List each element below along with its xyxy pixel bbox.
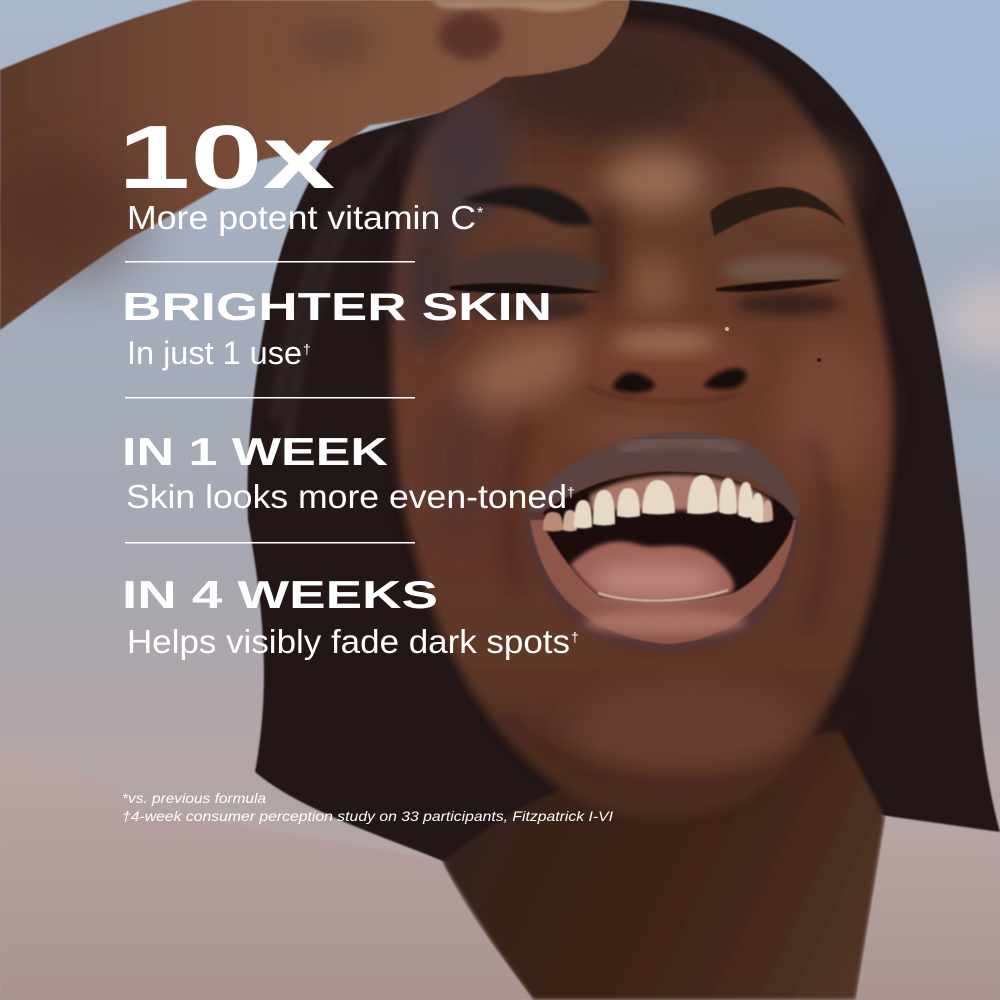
hair <box>247 0 1000 862</box>
footnote mark: † <box>571 629 579 645</box>
stat: brighter skin <box>122 286 552 371</box>
fist fold <box>438 12 502 60</box>
subline: Helps visibly fade dark spots <box>127 623 570 660</box>
arm <box>0 0 630 330</box>
knuckles <box>430 0 605 12</box>
headline 10x: 10x <box>118 108 335 208</box>
stat: in 1 week <box>122 431 575 515</box>
upper lip highlight <box>620 442 740 450</box>
footnote mark: * <box>477 205 483 222</box>
nose <box>584 324 821 402</box>
subline: In just 1 use <box>127 335 302 371</box>
eyebrow left <box>463 186 593 225</box>
lower lip <box>523 512 800 653</box>
subline: Skin looks more even-toned <box>126 478 567 515</box>
footnotes <box>122 790 613 824</box>
upper lip <box>527 432 801 518</box>
elbow shadow <box>0 155 140 275</box>
eyebrow right <box>710 187 846 236</box>
mouth interior <box>543 471 794 602</box>
eye left <box>450 248 604 320</box>
teeth <box>543 475 773 532</box>
shirt right <box>856 816 1000 1000</box>
mouth <box>523 432 801 653</box>
shirt left <box>0 751 533 1000</box>
forehead shadow from arm <box>402 45 700 350</box>
neck <box>442 730 885 1000</box>
eye right <box>716 255 847 315</box>
skin highlights <box>420 145 880 780</box>
footnotes: †4-week consumer perception study on 33 participants, Fitzpatrick I-VI <box>122 808 613 824</box>
footnote mark: † <box>303 341 311 357</box>
stat: in 4 weeks <box>122 574 579 660</box>
footnotes: *vs. previous formula <box>122 790 266 806</box>
tongue <box>570 542 734 602</box>
heading: BRIGHTER SKIN <box>122 286 552 329</box>
heading: IN 4 WEEKS <box>122 574 438 617</box>
soft creases <box>500 205 850 785</box>
gums <box>590 475 770 510</box>
heading: IN 1 WEEK <box>122 431 388 474</box>
stat: 10x more potent vitamin C <box>118 108 483 236</box>
face <box>391 22 892 819</box>
footnote mark: † <box>567 484 575 500</box>
arm and fist <box>0 0 630 330</box>
wrist shadow <box>293 20 377 64</box>
subline: More potent vitamin C <box>127 199 476 236</box>
